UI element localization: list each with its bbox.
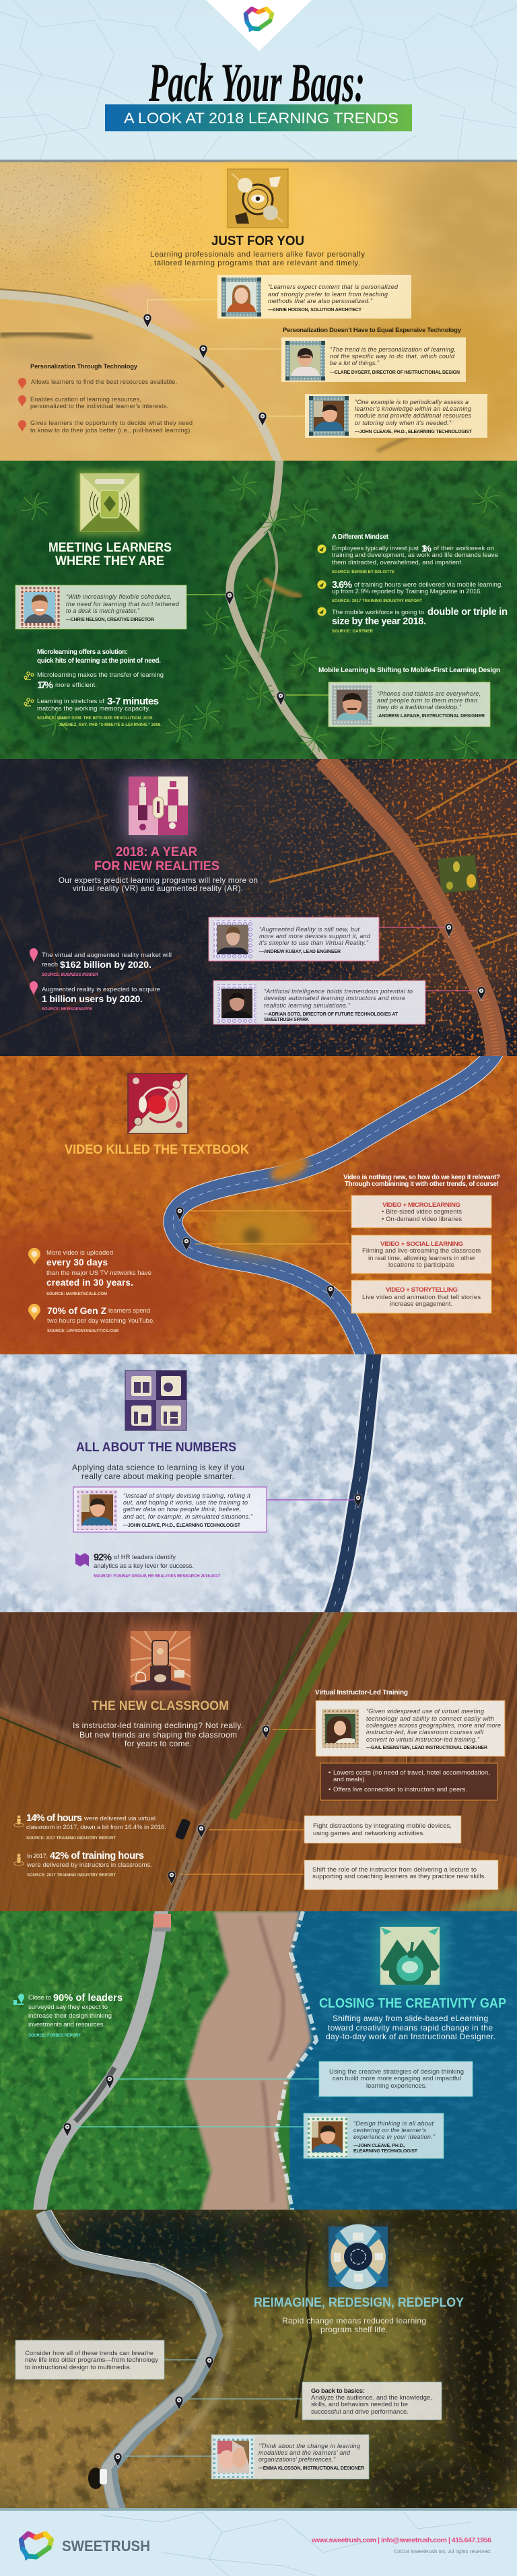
quote: John Cleave: ELEARNING TECHNOLOGIST xyxy=(353,2149,418,2154)
box: benefits: • xyxy=(329,1769,331,1777)
list: personalization through technology: Enables curation of learning resources, xyxy=(30,396,141,403)
text: a different mindset stats: of training hours were delivered via mobile learning, xyxy=(354,581,503,589)
quote: Annie Hodson: and strongly prefer to learn from teaching xyxy=(268,291,388,298)
box: fight distractions: Fight distractions by integrating mobile devices, xyxy=(313,1822,452,1830)
heading xyxy=(94,845,219,873)
panel: reimagine, redesign, redeploy xyxy=(0,2210,517,2508)
stat: 92 percent: 92% xyxy=(94,1552,112,1563)
box: go back to basics: skills, and behaviors needed to be xyxy=(311,2401,408,2408)
box: video + microlearning: VIDEO + MICROLEARNING xyxy=(382,1201,460,1209)
box: video + social learning xyxy=(351,1235,491,1274)
box: benefits: Offers live connection to instructors and peers. xyxy=(333,1786,467,1793)
box: video + social learning: Filming and live-streaming the classroom xyxy=(362,1247,481,1254)
stat: 92 percent: SOURCE: FOSWAY GROUP, HR REALITIES RESEARCH 2016-2017 xyxy=(94,1575,221,1579)
quote: Gail Eisenstein: “Given widespread use of virtual meeting xyxy=(366,1708,484,1715)
quote: Annie Hodson: —ANNIE HODSON, SOLUTION ARCHITECT xyxy=(268,308,362,312)
text: microlearning stats: quick hits of learning at the point of need. xyxy=(37,657,161,665)
intro text: But new trends are shaping the classroom xyxy=(79,1730,237,1740)
contact details: www.sweetrush.com | info@sweetrush.com | 415.647.1956 xyxy=(311,2536,491,2544)
panel: meeting learners where they are xyxy=(0,444,517,768)
background: coast road xyxy=(0,1910,517,2216)
stat: 90 percent of leaders: SOURCE: FORBES REPORT xyxy=(28,2034,81,2038)
quote: Gail Eisenstein: technology and ability to connect easily with xyxy=(366,1715,494,1722)
stat: 90 percent of leaders: investments and resources. xyxy=(28,2021,105,2028)
heading: FOR NEW REALITIES xyxy=(94,859,219,873)
intro text xyxy=(59,876,258,893)
text: microlearning stats xyxy=(24,649,164,727)
heading: 2018: A YEAR xyxy=(116,845,197,859)
box: video + microlearning: • On-demand video libraries xyxy=(382,1215,462,1222)
background: snowy forest road xyxy=(0,1350,517,1620)
text: market stats: The virtual and augmented reality market will xyxy=(42,952,172,959)
list: personalization through technology: Personalization Through Technology xyxy=(30,363,138,370)
text: classroom stats: were delivered via virtual xyxy=(83,1815,156,1822)
box: shift the role: supporting and coaching learners as they practice new skills. xyxy=(312,1873,486,1880)
intro text: Our experts predict learning programs will rely more on xyxy=(59,876,258,885)
intro text: tailored learning programs that are relevant and timely. xyxy=(154,259,360,267)
box: breathe new life: Consider how all of these trends can breathe xyxy=(25,2350,153,2357)
box: go back to basics: successful and drive performance. xyxy=(311,2408,409,2416)
connector and pin xyxy=(63,2123,304,2137)
icon: mobile phone xyxy=(76,469,143,535)
callout text: Through combinining it with other trends, of course! xyxy=(345,1181,499,1188)
heading xyxy=(48,541,172,568)
box: fight distractions: using games and networking activities. xyxy=(313,1830,425,1837)
quote: Chris Nelson: to a desk is much greater.” xyxy=(66,607,140,614)
heading: WHERE THEY ARE xyxy=(55,554,164,568)
subtitle banner: A LOOK AT 2018 LEARNING TRENDS xyxy=(124,110,399,127)
background: night city xyxy=(0,741,517,1061)
quote: Chris Nelson: —CHRIS NELSON, CREATIVE DIRECTOR xyxy=(66,618,154,622)
icon: video headset xyxy=(128,1074,188,1133)
intro text: Rapid change means reduced learning xyxy=(282,2316,426,2325)
box: shift the role xyxy=(304,1860,498,1890)
quote: Clare Dygert: —CLARE DYGERT, DIRECTOR OF INSTRUCTIONAL DESIGN xyxy=(330,370,460,375)
quote: Andrew Kubay: more and more devices support it, and xyxy=(259,933,371,939)
text: market stats: SOURCE: NEWSGENAPPS xyxy=(42,1008,92,1012)
quote: John Cleave xyxy=(304,2113,444,2158)
quote: John Cleave: or tutoring only when it’s needed.” xyxy=(355,420,452,426)
intro text: Learning professionals and learners alike favor personally xyxy=(150,251,365,259)
quote: Andrew Kubay: it’s simpler to use than Virtual Reality.” xyxy=(259,939,369,946)
quote: Gail Eisenstein: instructor-led, live classroom courses will xyxy=(366,1729,484,1736)
panel: 2018 a year for new realities xyxy=(0,741,517,1061)
callout text: Video is nothing new, so how do we keep it relevant? xyxy=(343,1174,500,1181)
heading: MEETING LEARNERS xyxy=(48,541,172,555)
box: video + storytelling xyxy=(351,1280,491,1313)
icon: data dashboards xyxy=(125,1370,186,1430)
connector and pin xyxy=(277,692,329,706)
text: a different mindset stats: Employees typically invest just xyxy=(332,545,419,552)
logo badge xyxy=(206,0,312,51)
text: classroom stats: 14% of hours xyxy=(26,1813,82,1824)
stat: 92 percent xyxy=(75,1552,221,1579)
heading: JUST FOR YOU xyxy=(211,234,304,249)
intro text: really care about making people smarter. xyxy=(81,1472,234,1481)
text: market stats xyxy=(30,948,172,1012)
background: autumn forest road xyxy=(0,1051,517,1367)
quote: John Cleave: and act, for example, in simulated situations.” xyxy=(123,1513,253,1520)
intro text: for years to come. xyxy=(125,1739,192,1748)
text: classroom stats: were delivered by instructors in classrooms. xyxy=(26,1861,152,1869)
quote: Adrian Soto xyxy=(213,981,425,1024)
quote: John Cleave: experience in your ideation.” xyxy=(353,2134,436,2140)
box: benefits: Lowers costs (no need of travel, hotel accommodation, xyxy=(333,1769,490,1777)
stat: 92 percent: analytics as a key lever for success. xyxy=(94,1562,194,1570)
background: farm fields xyxy=(0,1612,517,1911)
box: video + storytelling: increase engagement. xyxy=(390,1300,452,1307)
text: microlearning stats: SOURCE: MINDY GYM. THE BITE-SIZE REVOLUTION. 2015. xyxy=(37,717,153,721)
text: a different mindset stats: training and development, as work and life demands leave xyxy=(332,552,498,559)
icon: personalization wheel xyxy=(223,165,292,232)
icon: design thinking brain xyxy=(376,1923,444,1989)
quote: Andrew Lapage: and people turn to them more than xyxy=(377,697,477,704)
intro text: Applying data science to learning is key if you xyxy=(72,1463,244,1472)
text: a different mindset stats: them distracted, overwhelmed, and impatient. xyxy=(332,559,463,566)
connector and pin 1 xyxy=(143,300,217,328)
quote: John Cleave: gather data on how people think, believe, xyxy=(123,1506,241,1513)
text: microlearning stats: 17% xyxy=(37,680,53,691)
text: video stats: SOURCE: UPFRONTANALYTICS.COM xyxy=(47,1329,118,1333)
connector and pin xyxy=(379,923,453,937)
box: creative strategies: Using the creative strategies of design thinking xyxy=(329,2068,464,2076)
quote: Chris Nelson: the need for learning that isn’t tethered xyxy=(66,601,180,607)
background: desert road xyxy=(0,141,517,465)
title: Pack Your Bags: xyxy=(148,52,365,113)
quote: Clare Dygert: be a lot of things.” xyxy=(330,360,380,366)
quote: Chris Nelson: “With increasingly flexible schedules, xyxy=(66,593,172,600)
text: a different mindset stats: SOURCE: BERSIN BY DELOITTE xyxy=(332,570,394,574)
quote: Gail Eisenstein xyxy=(316,1700,505,1756)
intro text xyxy=(326,2014,495,2041)
box: benefits: and meals). xyxy=(333,1776,366,1783)
quote: Andrew Lapage xyxy=(329,682,490,727)
quote: Chris Nelson xyxy=(15,585,186,629)
connector and pin xyxy=(175,2396,302,2410)
intro text: program shelf life. xyxy=(320,2325,388,2334)
quote: Andrew Kubay xyxy=(209,917,379,961)
text: classroom stats: 42% of training hours xyxy=(50,1851,144,1861)
text: a different mindset stats: A Different Mindset xyxy=(332,533,389,541)
box: video + microlearning xyxy=(351,1195,491,1228)
box: video + microlearning: • Bite-sized video segments xyxy=(382,1208,462,1215)
quote: John Cleave: module and provide additional resources xyxy=(355,412,471,419)
text: video stats: SOURCE: MARKETSCALE.COM xyxy=(46,1292,107,1296)
connector and pin xyxy=(267,1494,362,1508)
quote: Adrian Soto: develop automated learning instructors and more xyxy=(264,995,405,1001)
quote: Adrian Soto: —ADRIAN SOTO, DIRECTOR OF FUTURE TECHNOLOGIES AT xyxy=(264,1012,399,1017)
callout text xyxy=(343,1174,500,1188)
text: microlearning stats: Microlearning makes the transfer of learning xyxy=(37,671,164,679)
box: breathe new life: to instructional design to multimedia. xyxy=(25,2364,131,2371)
box: breathe new life: new life into older programs—from technology xyxy=(25,2356,158,2364)
quote: Annie Hodson xyxy=(217,275,411,319)
text: video stats: created in 30 years. xyxy=(46,1278,133,1288)
text: video stats: two hours per day watching YouTube. xyxy=(47,1317,155,1325)
quote: Clare Dygert: not the specific way to do that, which could xyxy=(330,353,455,360)
copyright: ©2018 SweetRush Inc. All rights reserved. xyxy=(394,2548,491,2554)
box: video + social learning: VIDEO + SOCIAL LEARNING xyxy=(380,1241,463,1248)
box: go back to basics: Go back to basics: xyxy=(311,2387,365,2395)
quote: Gail Eisenstein: convert to virtual instructor-led training.” xyxy=(366,1736,480,1743)
text: market stats: Augmented reality is expected to acquire xyxy=(42,986,160,993)
box: go back to basics xyxy=(302,2382,442,2420)
list: personalization through technology: Allows learners to find the best resources available. xyxy=(31,378,177,385)
connector and pin xyxy=(425,987,485,1001)
quote: Andrew Lapage: they do a traditional desktop.” xyxy=(377,704,462,711)
connector and pin xyxy=(262,1725,316,1740)
intro text xyxy=(72,1463,244,1481)
subheading: Personalization Doesn’t Have to Equal Expensive Technology xyxy=(283,327,462,334)
box: video + social learning: in real time, allowing learners in other xyxy=(368,1254,475,1261)
text: microlearning stats: matches the working memory capacity. xyxy=(37,705,150,713)
icon: new classroom devices xyxy=(125,1626,196,1696)
connectors and pins xyxy=(176,1207,351,1299)
quote: John Cleave: “Design thinking is all about xyxy=(353,2120,434,2127)
connector and pin xyxy=(197,1824,304,1839)
quote: Adrian Soto: SWEETRUSH SPARK xyxy=(264,1018,309,1022)
connector and pin 2 xyxy=(199,345,281,359)
box: breathe new life xyxy=(15,2340,164,2379)
list: personalization through technology: personalized to the individual learner’s interests. xyxy=(30,403,168,409)
quote: John Cleave: learner’s knowledge within an eLearning xyxy=(355,405,471,412)
box: video + storytelling: VIDEO + STORYTELLING xyxy=(386,1286,458,1294)
text: classroom stats: SOURCE: 2017 TRAINING INDUSTRY REPORT xyxy=(26,1837,116,1841)
list: personalization through technology xyxy=(18,363,193,434)
quote: Andrew Kubay: —ANDREW KUBAY, LEAD ENGINEER xyxy=(259,950,341,954)
stat: 90 percent of leaders: surveyed say they expect to xyxy=(28,2004,108,2011)
panel: all about the numbers xyxy=(0,1350,517,1620)
quote: Annie Hodson: methods that are also personalized.” xyxy=(268,298,373,304)
text: a different mindset stats: The mobile workforce is going to xyxy=(332,609,424,616)
quote: Andrew Lapage: -ANDREW LAPAGE, INSTRUCTIONAL DESIGNER xyxy=(377,714,485,719)
panel: closing the creativity gap xyxy=(0,1910,517,2216)
text: a different mindset stats: SOURCE: 2017 TRAINING INDUSTRY REPORT xyxy=(332,599,422,603)
quote: John Cleave: “Instead of simply devising training, rolling it xyxy=(123,1492,250,1499)
subheading: Virtual Instructor-Led Training xyxy=(315,1689,408,1696)
quote: John Cleave xyxy=(73,1487,267,1532)
quote: John Cleave: —JOHN CLEAVE, PH.D., ELEARNING TECHNOLOGIST xyxy=(123,1523,241,1528)
text: video stats: learners spend xyxy=(108,1307,150,1315)
stat: 92 percent: of HR leaders identify xyxy=(114,1554,176,1561)
text: video stats xyxy=(28,1248,155,1333)
quote: John Cleave: —JOHN CLEAVE, PH.D., ELEARNING TECHNOLOGIST xyxy=(355,430,473,434)
text: microlearning stats: JIMENEZ, RAY. PHD “3-MINUTE E-LEARNING.” 2006. xyxy=(59,723,162,727)
intro text: virtual reality (VR) and augmented reality (AR). xyxy=(73,884,243,893)
box: fight distractions xyxy=(304,1816,461,1843)
text: a different mindset stats: 1% xyxy=(421,543,432,554)
intro text: toward creativity means rapid change in the xyxy=(328,2023,493,2033)
text: video stats: every 30 days xyxy=(46,1257,108,1267)
quote: Adrian Soto: “Artificial Intelligence holds tremendous potential to xyxy=(264,988,413,995)
stat: 90 percent of leaders: increase their design thinking xyxy=(28,2012,112,2020)
panel: the new classroom xyxy=(0,1612,517,1911)
quote: Emma Klosson xyxy=(211,2435,369,2479)
brand name: SWEETRUSH xyxy=(62,2538,150,2554)
intro text: day-to-day work of an Instructional Designer. xyxy=(326,2032,495,2041)
intro text xyxy=(282,2316,426,2334)
text: a different mindset stats xyxy=(318,533,508,634)
quote: Clare Dygert: “The trend is the personalization of learning, xyxy=(330,346,456,353)
quote: Clare Dygert xyxy=(281,337,466,382)
quote: Gail Eisenstein: colleagues across geographies, more and more xyxy=(366,1722,501,1729)
panel: just for you xyxy=(0,141,517,465)
box: video + storytelling: Live video and animation that tell stories xyxy=(362,1293,481,1300)
list: personalization through technology: Gives learners the opportunity to decide what they need xyxy=(30,420,193,426)
intro text xyxy=(150,251,365,267)
text: market stats: $162 billion by 2020. xyxy=(60,959,151,970)
quote: Annie Hodson: “Learners expect content that is personalized xyxy=(268,284,399,290)
text: video stats: More video is uploaded xyxy=(46,1249,113,1257)
list: personalization through technology: to know to do their jobs better (i.e., pull-based learning). xyxy=(30,427,192,434)
text: classroom stats: In 2017, xyxy=(27,1853,48,1860)
stat: 90 percent of leaders: Close to xyxy=(28,1994,51,2002)
connector and pin xyxy=(164,2356,213,2371)
box: video + social learning: locations to participate xyxy=(388,1261,454,1268)
intro text: Is instructor-led training declining? Not really. xyxy=(73,1721,243,1730)
text: microlearning stats: more efficient. xyxy=(55,682,97,689)
text: a different mindset stats: double or triple in xyxy=(427,607,508,618)
quote: John Cleave: centering on the learner’s xyxy=(353,2127,427,2134)
box: creative strategies: can build more more engaging and impactful xyxy=(333,2075,461,2082)
text: a different mindset stats: SOURCE: GARTNER xyxy=(332,630,374,634)
text: classroom stats: SOURCE: 2017 TRAINING INDUSTRY REPORT xyxy=(27,1874,116,1878)
text: a different mindset stats: size by the year 2018. xyxy=(332,616,426,627)
header: map background with logo and title xyxy=(0,0,517,162)
connector and pin xyxy=(186,591,234,605)
heading: THE NEW CLASSROOM xyxy=(92,1699,229,1713)
text: classroom stats xyxy=(14,1813,166,1878)
box: benefits xyxy=(320,1756,497,1800)
text: microlearning stats: Learning in stretches of xyxy=(37,698,104,705)
quote: Adrian Soto: realistic learning simulations.” xyxy=(264,1002,351,1009)
connector and pin xyxy=(106,2075,319,2089)
text: video stats: 70% of Gen Z xyxy=(47,1305,106,1316)
panel: video killed the textbook xyxy=(0,1051,517,1367)
text: video stats: than the major US TV networks have xyxy=(46,1269,151,1277)
box: shift the role: Shift the role of the instructor from delivering a lecture to xyxy=(312,1866,477,1874)
footer xyxy=(0,2508,517,2576)
text: a different mindset stats: up from 2.9% reported by Training Magazine in 2016. xyxy=(332,588,482,595)
quote: John Cleave: out, and hoping it works, use the training to xyxy=(123,1499,248,1506)
logo xyxy=(22,2534,51,2561)
text: market stats: SOURCE: BUSINESS INSIDER xyxy=(42,973,99,977)
quote: John Cleave: “One example is to periodically assess a xyxy=(355,399,469,405)
box: benefits: • xyxy=(329,1786,331,1793)
text: market stats: reach xyxy=(42,961,58,968)
connector and pin xyxy=(168,1871,304,1885)
background: jungle road xyxy=(0,444,517,768)
quote: Emma Klosson: organizations’ preferences.” xyxy=(258,2456,336,2463)
icon: redeploy cycle xyxy=(324,2222,392,2291)
heading: ALL ABOUT THE NUMBERS xyxy=(76,1440,236,1455)
box: creative strategies: learning experiences. xyxy=(366,2082,427,2090)
text: microlearning stats: Microlearning offers a solution: xyxy=(37,649,128,656)
heading: REIMAGINE, REDESIGN, REDEPLOY xyxy=(254,2295,464,2310)
quote: Emma Klosson: —EMMA KLOSSON, INSTRUCTIONAL DESIGNER xyxy=(258,2466,364,2471)
quote: Emma Klosson: “Think about the change in learning xyxy=(258,2443,360,2449)
connector and pin 3 xyxy=(258,412,305,426)
box: creative strategies xyxy=(319,2061,473,2096)
box: go back to basics: Analyze the audience, and the knowledge, xyxy=(311,2394,432,2402)
stat: 90 percent of leaders: 90% of leaders xyxy=(53,1993,123,2004)
quote: Emma Klosson: modalities and the learners’ and xyxy=(258,2449,351,2456)
text: classroom stats: classroom in 2017, down a bit from 16.4% in 2016. xyxy=(26,1824,166,1831)
text: a different mindset stats: of their workweek on xyxy=(434,545,494,552)
quote: John Cleave xyxy=(305,394,487,438)
intro text: Shifting away from slide-based eLearning xyxy=(333,2014,488,2023)
quote: Andrew Kubay: “Augmented Reality is still new, but xyxy=(259,926,359,933)
subheading: Mobile Learning Is Shifting to Mobile-First Learning Design xyxy=(318,667,500,674)
background: mountain road xyxy=(0,2148,517,2525)
stat: 90 percent of leaders xyxy=(13,1993,123,2038)
connector and pin xyxy=(114,2453,211,2467)
icon: vr and ar figures xyxy=(123,772,194,842)
subtitle banner xyxy=(105,104,412,131)
quote: Andrew Lapage: “Phones and tablets are everywhere, xyxy=(377,690,481,697)
heading: VIDEO KILLED THE TEXTBOOK xyxy=(65,1143,249,1157)
quote: John Cleave: —JOHN CLEAVE, PH.D., xyxy=(353,2144,405,2148)
text: microlearning stats: 3-7 minutes xyxy=(107,696,159,707)
intro text xyxy=(73,1721,243,1748)
text: a different mindset stats: 3.6% xyxy=(332,580,352,591)
quote: Gail Eisenstein: —GAIL EISENSTEIN, LEAD INSTRUCTIONAL DESIGNER xyxy=(366,1746,487,1750)
text: market stats: 1 billion users by 2020. xyxy=(42,993,143,1004)
